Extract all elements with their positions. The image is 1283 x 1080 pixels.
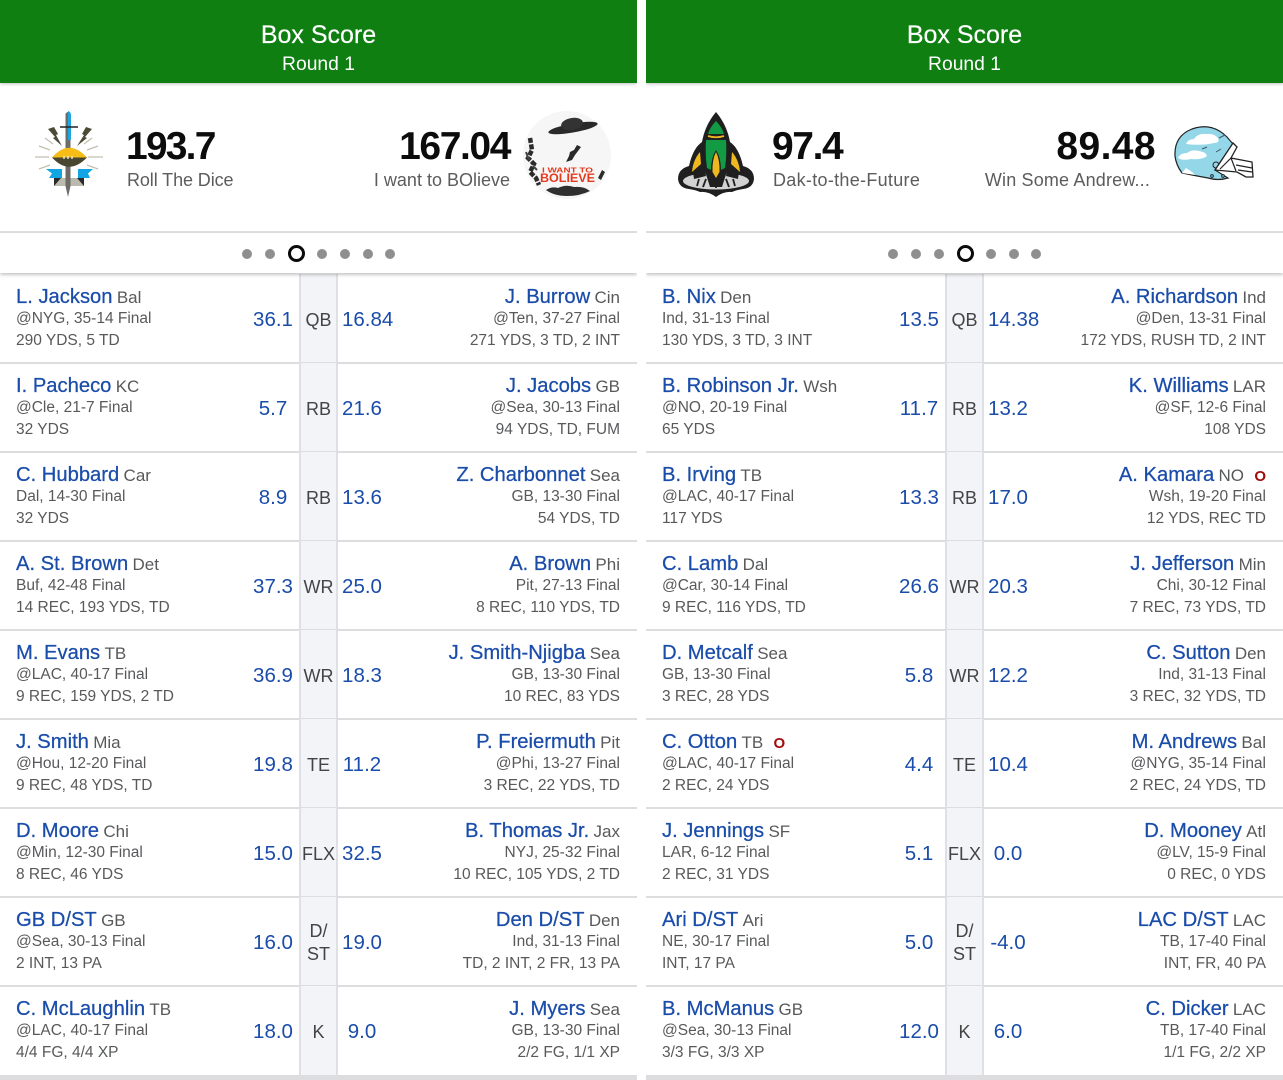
row: RB matchup 2: 32 YDS	[16, 510, 69, 527]
row: WR matchup 1: 20.3	[988, 575, 1028, 598]
row: FLX matchup: @LV, 15-9 Final	[1156, 844, 1266, 861]
row: RB matchup 2: C. Hubbard Car	[16, 464, 151, 486]
row: TE matchup: @Hou, 12-20 Final	[16, 755, 146, 772]
icon: I want to believe UFO logo: BOLIEVE	[540, 171, 595, 185]
row: QB matchup	[646, 274, 1283, 364]
row: TE matchup: J. Smith Mia	[16, 731, 121, 753]
icon: sky blue helmet	[1174, 126, 1254, 180]
row: QB matchup: 13.5	[899, 308, 939, 331]
row: K matchup	[16, 986, 620, 1075]
row: FLX matchup: 8 REC, 46 YDS	[16, 866, 123, 883]
row: QB matchup: B. Nix Den	[662, 286, 751, 308]
row: RB matchup 2: 13.3	[899, 486, 939, 509]
row: FLX matchup: 32.5	[342, 842, 382, 865]
row: FLX matchup: NYJ, 25-32 Final	[505, 844, 620, 861]
row: TE matchup: 9 REC, 48 YDS, TD	[16, 777, 152, 794]
icon: rocket logo	[678, 112, 754, 197]
page dots	[0, 233, 637, 273]
row: D/ST matchup: NE, 30-17 Final	[662, 933, 770, 950]
row: FLX matchup: 5.1	[905, 842, 933, 865]
row: TE matchup: 2 REC, 24 YDS	[662, 777, 769, 794]
row: TE matchup: @LAC, 40-17 Final	[662, 755, 794, 772]
row: WR matchup 2: GB, 13-30 Final	[662, 666, 771, 683]
row: QB matchup: @Ten, 37-27 Final	[493, 310, 620, 327]
row: WR matchup 1: J. Jefferson Min	[1130, 553, 1266, 575]
row: TE matchup: TE	[307, 755, 330, 775]
row: TE matchup	[0, 719, 637, 809]
page dots	[646, 233, 1283, 273]
row: TE matchup: 19.8	[253, 753, 293, 776]
row: TE matchup: 3 REC, 22 YDS, TD	[484, 777, 620, 794]
row: WR matchup 2: D. Metcalf Sea	[662, 642, 787, 664]
row: WR matchup 2: 3 REC, 32 YDS, TD	[1130, 688, 1266, 705]
row: WR matchup 2: Ind, 31-13 Final	[1158, 666, 1266, 683]
row: RB matchup 2: Z. Charbonnet Sea	[456, 464, 620, 486]
row: D/ST matchup: INT, FR, 40 PA	[1164, 955, 1266, 972]
row: TE matchup: P. Freiermuth Pit	[476, 731, 620, 753]
header: Box Score Round 1	[646, 0, 1283, 83]
row: D/ST matchup	[646, 897, 1283, 987]
row: WR matchup 1: A. St. Brown Det	[16, 553, 159, 575]
row: QB matchup: 271 YDS, 3 TD, 2 INT	[470, 332, 620, 349]
row: RB matchup 2: RB	[952, 488, 977, 508]
icon: I want to believe UFO logo: I WANT TO	[542, 166, 593, 174]
row: FLX matchup	[0, 808, 637, 898]
row: WR matchup 2: GB, 13-30 Final	[511, 666, 620, 683]
row: WR matchup 2: 9 REC, 159 YDS, 2 TD	[16, 688, 174, 705]
row: RB matchup 2: Wsh, 19-20 Final	[1149, 488, 1266, 505]
panel: left box score	[0, 0, 637, 1080]
row: D/ST matchup: D/	[310, 921, 328, 941]
row: TE matchup	[646, 719, 1283, 809]
row: WR matchup 2: 12.2	[988, 664, 1028, 687]
row: WR matchup 2: 18.3	[342, 664, 382, 687]
row: RB matchup 2: @LAC, 40-17 Final	[662, 488, 794, 505]
row: K matchup: 4/4 FG, 4/4 XP	[16, 1044, 119, 1061]
row: K matchup: K	[312, 1022, 324, 1042]
row: FLX matchup: 0 REC, 0 YDS	[1167, 866, 1266, 883]
row: RB matchup 2	[646, 452, 1283, 542]
row: FLX matchup: 10 REC, 105 YDS, 2 TD	[453, 866, 620, 883]
row: QB matchup: QB	[951, 310, 978, 330]
row: QB matchup: 14.38	[988, 308, 1039, 331]
icon: I want to believe UFO logo	[523, 111, 611, 199]
row: WR matchup 1	[646, 541, 1283, 631]
row: D/ST matchup: -4.0	[990, 931, 1026, 954]
row: WR matchup 2	[646, 630, 1283, 720]
row: K matchup: 12.0	[899, 1020, 939, 1043]
row: WR matchup 1: WR	[950, 577, 980, 597]
row: FLX matchup: 0.0	[994, 842, 1022, 865]
row: WR matchup 1: 25.0	[342, 575, 382, 598]
row: K matchup: 6.0	[994, 1020, 1022, 1043]
row: K matchup: 3/3 FG, 3/3 XP	[662, 1044, 765, 1061]
row: WR matchup 2: 10 REC, 83 YDS	[504, 688, 620, 705]
row: WR matchup 1: 8 REC, 110 YDS, TD	[476, 599, 620, 616]
row: RB matchup 2: 8.9	[259, 486, 287, 509]
row: RB matchup 2: Dal, 14-30 Final	[16, 488, 125, 505]
row: RB matchup 2: 13.6	[342, 486, 382, 509]
row: TE matchup: 11.2	[343, 753, 381, 776]
row: FLX matchup: LAR, 6-12 Final	[662, 844, 770, 861]
row: FLX matchup: FLX	[302, 844, 335, 864]
row: RB matchup 2: RB	[306, 488, 331, 508]
row: K matchup: GB, 13-30 Final	[511, 1022, 620, 1039]
row: K matchup: C. McLaughlin TB	[16, 998, 171, 1020]
row: QB matchup: A. Richardson Ind	[1111, 286, 1266, 308]
row: WR matchup 1: Buf, 42-48 Final	[16, 577, 125, 594]
row: QB matchup: 16.84	[342, 308, 393, 331]
row: RB matchup 2: GB, 13-30 Final	[511, 488, 620, 505]
row: RB matchup 2: 54 YDS, TD	[538, 510, 620, 527]
row: FLX matchup: 2 REC, 31 YDS	[662, 866, 769, 883]
row: D/ST matchup: TB, 17-40 Final	[1160, 933, 1266, 950]
row: TE matchup: TE	[953, 755, 976, 775]
row: RB matchup 2: A. Kamara NO O	[1119, 464, 1266, 486]
row: QB matchup: 36.1	[253, 308, 293, 331]
row: D/ST matchup: GB D/ST GB	[16, 909, 126, 931]
row: RB matchup 1: B. Robinson Jr. Wsh	[662, 375, 837, 397]
row: FLX matchup: J. Jennings SF	[662, 820, 790, 842]
row: D/ST matchup: Ari D/ST Ari	[662, 909, 763, 931]
row: RB matchup 2: 17.0	[988, 486, 1028, 509]
row: RB matchup 1: K. Williams LAR	[1129, 375, 1266, 397]
row: QB matchup	[0, 274, 637, 364]
row: RB matchup 2: 117 YDS	[662, 510, 723, 527]
row: QB matchup: QB	[305, 310, 332, 330]
row: K matchup	[662, 986, 1266, 1075]
team name: Win Some Andrew...: Win Some Andrew...	[985, 170, 1150, 190]
row: TE matchup: C. Otton TB O	[662, 731, 785, 753]
row: WR matchup 1: 26.6	[899, 575, 939, 598]
row: K matchup: 9.0	[348, 1020, 376, 1043]
row: RB matchup 1: 11.7	[900, 397, 938, 420]
row: D/ST matchup: Ind, 31-13 Final	[512, 933, 620, 950]
header: Box Score Round 1: Box Score	[907, 21, 1022, 49]
row: WR matchup 2: 36.9	[253, 664, 293, 687]
row: FLX matchup	[646, 808, 1283, 898]
row: D/ST matchup: 5.0	[905, 931, 933, 954]
row: FLX matchup: B. Thomas Jr. Jax	[465, 820, 620, 842]
row: RB matchup 2: B. Irving TB	[662, 464, 762, 486]
row: TE matchup: @Phi, 13-27 Final	[496, 755, 620, 772]
row: FLX matchup: @Min, 12-30 Final	[16, 844, 143, 861]
row: K matchup: C. Dicker LAC	[1146, 998, 1266, 1020]
row: TE matchup: 2 REC, 24 YDS, TD	[1130, 777, 1266, 794]
row: K matchup: K	[958, 1022, 970, 1042]
row: WR matchup 1: 14 REC, 193 YDS, TD	[16, 599, 170, 616]
row: D/ST matchup: Den D/ST Den	[496, 909, 620, 931]
row: RB matchup 1: 65 YDS	[662, 421, 715, 438]
row: RB matchup 1: RB	[306, 399, 331, 419]
row: QB matchup: @NYG, 35-14 Final	[16, 310, 151, 327]
row: K matchup: 1/1 FG, 2/2 XP	[1163, 1044, 1266, 1061]
row: QB matchup: Ind, 31-13 Final	[662, 310, 770, 327]
row: TE matchup: 4.4	[905, 753, 933, 776]
row: TE matchup: 10.4	[988, 753, 1028, 776]
row: RB matchup 2: 12 YDS, REC TD	[1147, 510, 1266, 527]
row: RB matchup 1: @Cle, 21-7 Final	[16, 399, 133, 416]
row: RB matchup 1: RB	[952, 399, 977, 419]
row: K matchup: 18.0	[253, 1020, 293, 1043]
row: WR matchup 1: 7 REC, 73 YDS, TD	[1130, 599, 1266, 616]
row: TE matchup: @NYG, 35-14 Final	[1131, 755, 1266, 772]
team name: I want to BOlieve: I want to BOlieve	[374, 170, 510, 190]
row: WR matchup 1: C. Lamb Dal	[662, 553, 768, 575]
row: QB matchup: 290 YDS, 5 TD	[16, 332, 120, 349]
header: Box Score Round 1: Box Score	[261, 21, 376, 49]
header: Box Score Round 1	[0, 0, 637, 83]
row: RB matchup 1	[646, 363, 1283, 453]
row: RB matchup 1: 21.6	[342, 397, 382, 420]
row: RB matchup 1: J. Jacobs GB	[506, 375, 620, 397]
row: D/ST matchup: ST	[307, 944, 330, 964]
score: I want to BOlieve: 167.04	[399, 125, 510, 168]
row: RB matchup 1	[0, 363, 637, 453]
row: WR matchup 2: M. Evans TB	[16, 642, 126, 664]
row: WR matchup 1: WR	[304, 577, 334, 597]
row: FLX matchup: 15.0	[253, 842, 293, 865]
score: Roll The Dice: 193.7	[126, 125, 215, 168]
row: WR matchup 1: 37.3	[253, 575, 293, 598]
row: D/ST matchup: INT, 17 PA	[662, 955, 735, 972]
row: WR matchup 2: @LAC, 40-17 Final	[16, 666, 148, 683]
row: RB matchup 1: 32 YDS	[16, 421, 69, 438]
row: QB matchup: 130 YDS, 3 TD, 3 INT	[662, 332, 812, 349]
row: WR matchup 1: Chi, 30-12 Final	[1157, 577, 1266, 594]
row: K matchup: TB, 17-40 Final	[1160, 1022, 1266, 1039]
row: WR matchup 1: Pit, 27-13 Final	[516, 577, 620, 594]
row: RB matchup 1: @Sea, 30-13 Final	[491, 399, 620, 416]
row: RB matchup 2	[0, 452, 637, 542]
row: FLX matchup: FLX	[948, 844, 981, 864]
row: WR matchup 2	[0, 630, 637, 720]
row: K matchup: @Sea, 30-13 Final	[662, 1022, 791, 1039]
row: K matchup: 2/2 FG, 1/1 XP	[517, 1044, 620, 1061]
row: WR matchup 1: 9 REC, 116 YDS, TD	[662, 599, 806, 616]
row: QB matchup: L. Jackson Bal	[16, 286, 141, 308]
row: FLX matchup: D. Mooney Atl	[1144, 820, 1266, 842]
row: WR matchup 2: 3 REC, 28 YDS	[662, 688, 769, 705]
row: QB matchup: 172 YDS, RUSH TD, 2 INT	[1080, 332, 1266, 349]
row: WR matchup 2: C. Sutton Den	[1146, 642, 1266, 664]
row: WR matchup 2: WR	[950, 666, 980, 686]
row: RB matchup 1: I. Pacheco KC	[16, 375, 139, 397]
row: WR matchup 1	[0, 541, 637, 631]
header: Box Score Round 1: Round 1	[282, 54, 355, 75]
row: WR matchup 2: J. Smith-Njigba Sea	[449, 642, 620, 664]
row: K matchup: B. McManus GB	[662, 998, 803, 1020]
row: D/ST matchup: 19.0	[342, 931, 382, 954]
row: D/ST matchup: TD, 2 INT, 2 FR, 13 PA	[463, 955, 620, 972]
row: K matchup: @LAC, 40-17 Final	[16, 1022, 148, 1039]
row: RB matchup 1: 108 YDS	[1204, 421, 1266, 438]
row: RB matchup 1: 5.7	[259, 397, 287, 420]
row: RB matchup 1: @NO, 20-19 Final	[662, 399, 787, 416]
panel: right box score	[646, 0, 1283, 1080]
row: D/ST matchup: ST	[953, 944, 976, 964]
row: QB matchup: J. Burrow Cin	[505, 286, 620, 308]
row: D/ST matchup: @Sea, 30-13 Final	[16, 933, 145, 950]
row: RB matchup 1: @SF, 12-6 Final	[1155, 399, 1266, 416]
team name: Dak-to-the-Future: Dak-to-the-Future	[773, 170, 920, 190]
row: WR matchup 2: 5.8	[905, 664, 933, 687]
row: WR matchup 1: A. Brown Phi	[509, 553, 620, 575]
row: QB matchup: @Den, 13-31 Final	[1136, 310, 1266, 327]
row: D/ST matchup: LAC D/ST LAC	[1138, 909, 1266, 931]
row: WR matchup 1: @Car, 30-14 Final	[662, 577, 788, 594]
header: Box Score Round 1: Round 1	[928, 54, 1001, 75]
row: D/ST matchup: 16.0	[253, 931, 293, 954]
row: TE matchup: M. Andrews Bal	[1132, 731, 1266, 753]
row: RB matchup 1: 13.2	[988, 397, 1028, 420]
row: RB matchup 1: 94 YDS, TD, FUM	[496, 421, 620, 438]
row: D/ST matchup: 2 INT, 13 PA	[16, 955, 102, 972]
row: FLX matchup: D. Moore Chi	[16, 820, 129, 842]
score: Win Some Andrew...: 89.48	[1056, 125, 1156, 168]
icon: sword and football logo	[35, 111, 103, 197]
row: D/ST matchup: D/	[956, 921, 974, 941]
row: K matchup: J. Myers Sea	[509, 998, 620, 1020]
score: Dak-to-the-Future: 97.4	[772, 125, 842, 168]
row: WR matchup 2: WR	[304, 666, 334, 686]
team name: Roll The Dice: Roll The Dice	[127, 170, 233, 190]
row: D/ST matchup	[0, 897, 637, 987]
